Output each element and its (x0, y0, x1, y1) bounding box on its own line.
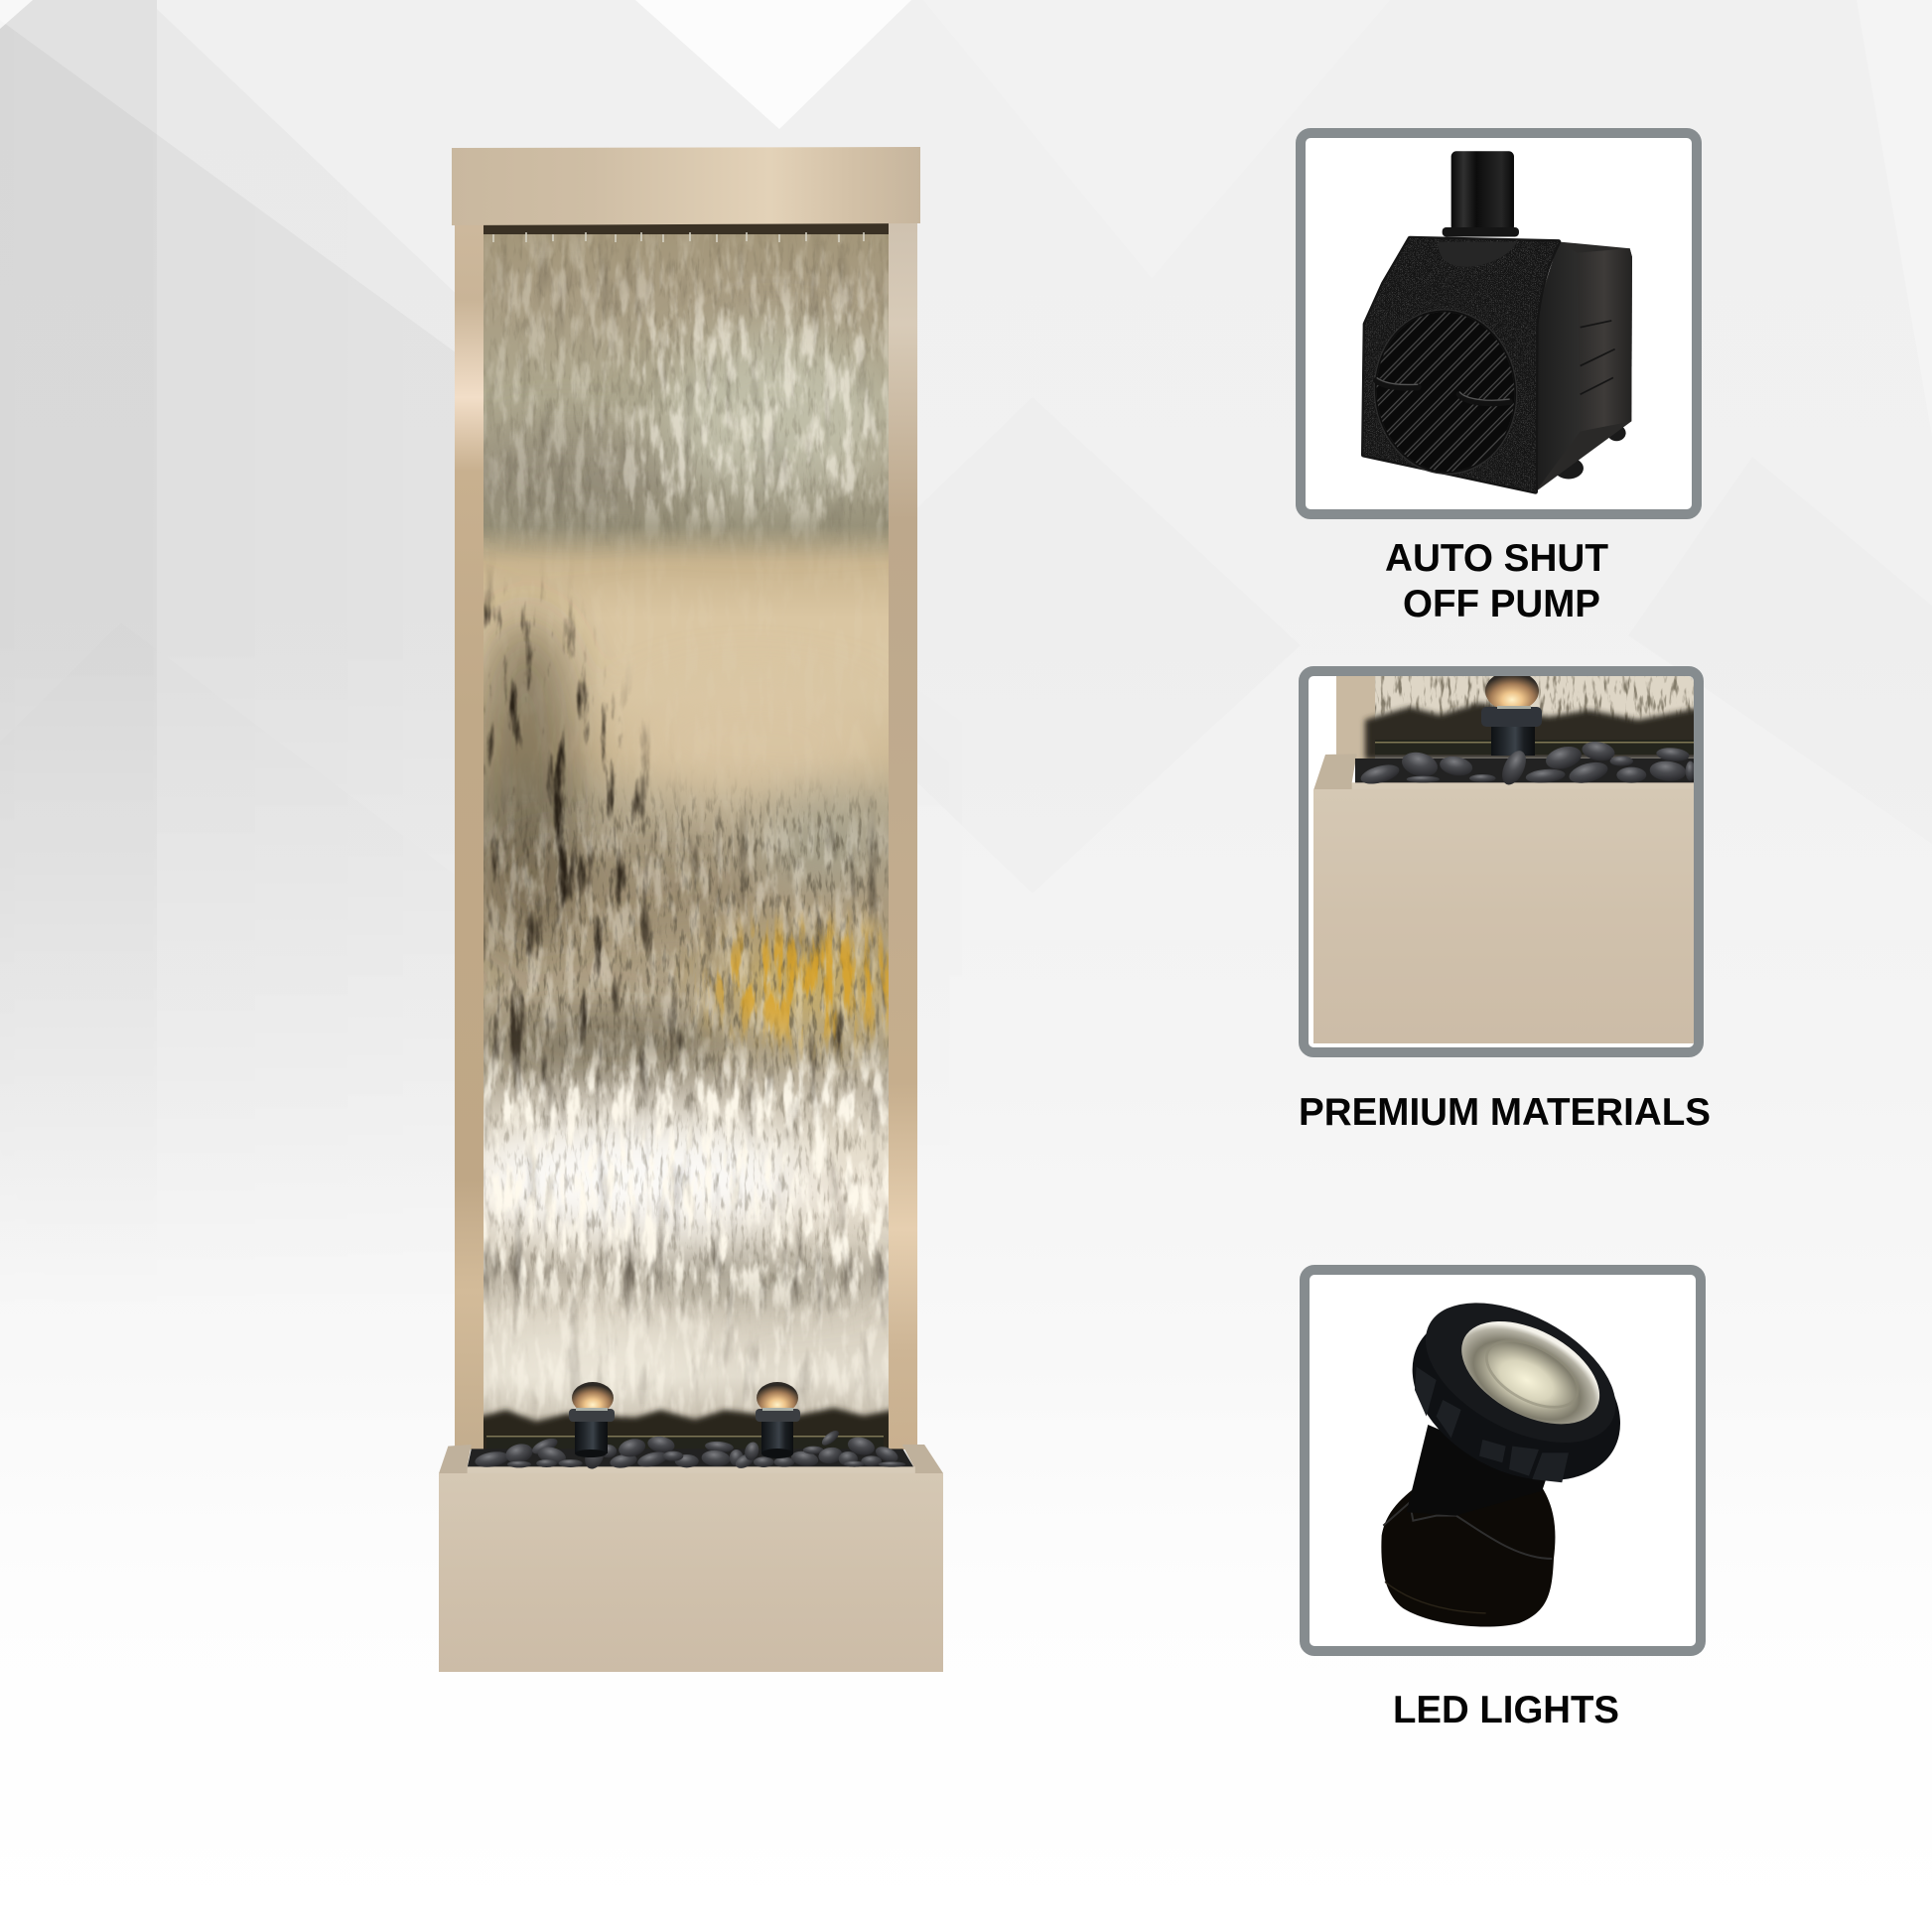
panel frame (1301, 133, 1697, 514)
base lip and basin (439, 1428, 943, 1473)
panel: auto shut off pump (1254, 133, 1697, 625)
panel background (1304, 671, 1699, 1052)
base box front (439, 1473, 943, 1672)
basin rocks (474, 1428, 905, 1471)
basin rocks close-up (1360, 742, 1694, 784)
frame: right post (889, 222, 917, 1449)
label: auto shut off pump: AUTO SHUT (1385, 537, 1608, 580)
panel frame (1305, 1270, 1701, 1651)
left spotlight (569, 1382, 615, 1457)
label: auto shut off pump: OFF PUMP (1403, 583, 1600, 625)
background: geometric grey facets (0, 0, 1932, 1302)
panel: premium materials (1299, 671, 1711, 1134)
glass water sheet (483, 223, 889, 1449)
frame: left post (455, 222, 483, 1449)
right spotlight (756, 1382, 800, 1458)
icon: LED spotlight (1381, 1274, 1649, 1627)
frame: top cap (452, 147, 920, 225)
icon: submersible pump (1254, 151, 1632, 495)
label: LED lights: LED LIGHTS (1393, 1689, 1619, 1731)
photo detail: basin close-up (1313, 671, 1704, 1043)
label: premium materials: PREMIUM MATERIALS (1299, 1091, 1711, 1134)
panel background (1301, 133, 1697, 514)
panel background (1305, 1270, 1701, 1651)
water wall fountain (439, 147, 943, 1672)
label: auto shut off pump (1385, 537, 1608, 625)
panel frame (1304, 671, 1699, 1052)
panel: LED lights (1305, 1270, 1701, 1731)
